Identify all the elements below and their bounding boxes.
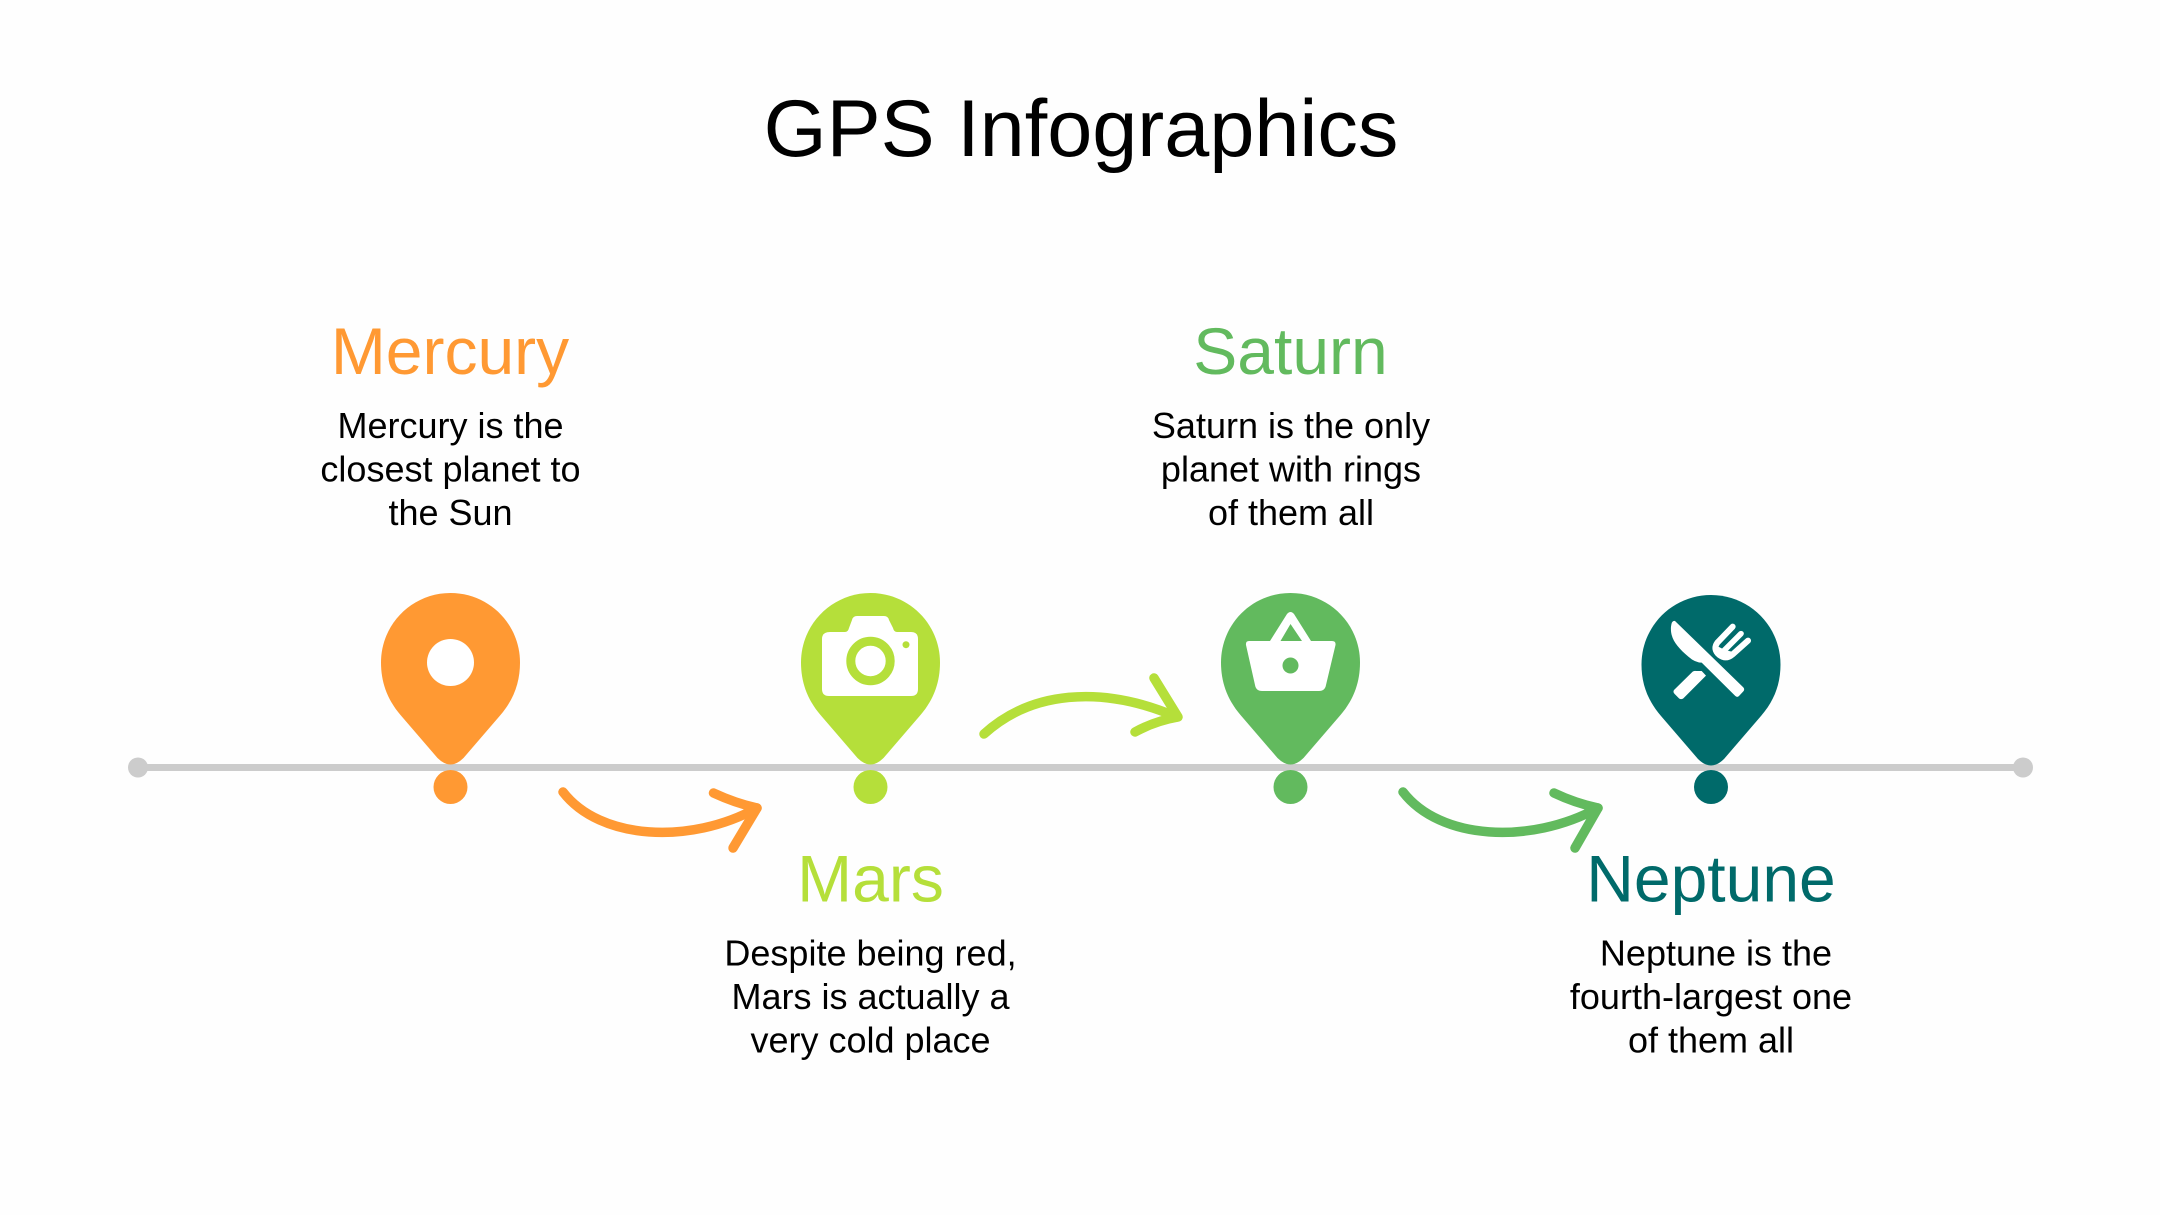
panel: Saturn (1152, 314, 1430, 804)
icon: Saturn basket pin (1221, 593, 1360, 804)
arrow: Mercury to Mars (563, 792, 757, 848)
heading: Mercury: Mercury (331, 314, 569, 388)
text block: Mars description: Mars is actually a (731, 976, 1011, 1017)
text block: Mercury description: the Sun (388, 492, 513, 533)
icon: Mars camera pin (801, 593, 940, 804)
text block: Neptune description: Neptune is the (1600, 932, 1832, 974)
panel: Mercury (320, 314, 581, 804)
text block: Neptune description: fourth-largest one (1570, 976, 1852, 1017)
panel: Mars (724, 593, 1017, 1060)
arrow: Saturn to Neptune (1403, 792, 1598, 848)
panel: Neptune (1570, 595, 1852, 1060)
text block: Mars description: very cold place (750, 1020, 991, 1060)
text block: Saturn description: Saturn is the only (1152, 405, 1430, 446)
text block: Saturn description: planet with rings (1161, 448, 1421, 490)
heading: Mars: Mars (797, 842, 944, 916)
text block: Mars description: Despite being red, (724, 932, 1017, 974)
text block: Saturn description: of them all (1208, 492, 1374, 533)
icon: Neptune fork and knife pin (1642, 595, 1780, 804)
text block: Mercury description: Mercury is the (337, 405, 564, 446)
text block: Neptune description: of them all (1628, 1020, 1794, 1060)
text block: Mercury description: closest planet to (320, 448, 581, 490)
title: GPS Infographics (764, 84, 1398, 174)
heading: Saturn: Saturn (1193, 314, 1388, 388)
arrow: Mars to Saturn (984, 678, 1178, 734)
heading: Neptune: Neptune (1586, 842, 1836, 916)
timeline line (128, 758, 2033, 778)
icon: Mercury location pin (381, 593, 520, 804)
